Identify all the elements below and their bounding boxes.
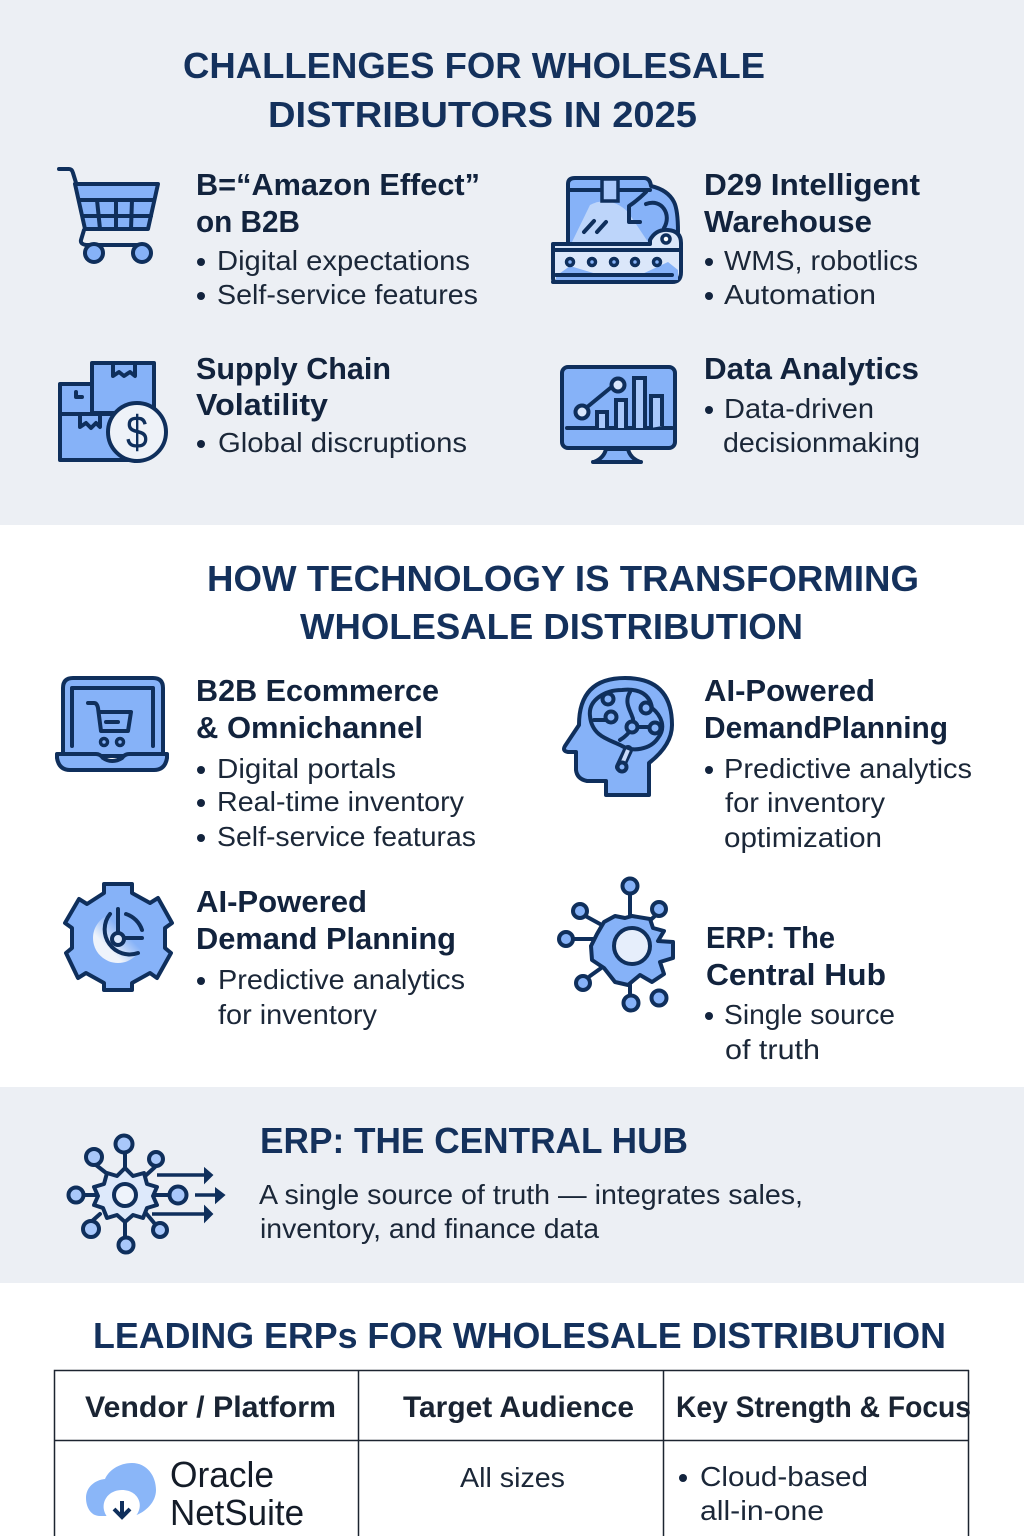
icon: brain head xyxy=(564,678,672,795)
text: B2B ecommerce: & Omnichannel xyxy=(196,710,423,745)
text: Amazon effect: Digital expectations xyxy=(217,245,470,276)
icon: shopping cart xyxy=(59,169,158,262)
text: AI demand planning one: AI-Powered xyxy=(704,673,875,708)
table header: vendor: Vendor / Platform xyxy=(85,1391,336,1424)
table: ERP vendors xyxy=(54,1370,971,1536)
text: ERP the central hub xyxy=(705,920,895,1065)
text: ERP the central hub: Central Hub xyxy=(706,957,886,992)
panel: how technology is transforming xyxy=(57,558,972,1065)
text: Amazon effect: on B2B xyxy=(196,204,300,239)
text: AI demand planning two: for inventory xyxy=(218,999,377,1030)
text: ERP the central hub: of truth xyxy=(725,1034,820,1065)
text: ERP the central hub: Single source xyxy=(724,999,895,1030)
icon: gear with clock xyxy=(65,884,172,990)
text: intelligent warehouse: D29 Intelligent xyxy=(704,167,920,202)
text: B2B ecommerce xyxy=(196,673,476,852)
heading: ERP the central hub: ERP: THE CENTRAL HUB xyxy=(260,1120,688,1161)
text: single source of truth: inventory, and finance data xyxy=(260,1213,599,1244)
cell: Oracle NetSuite xyxy=(170,1454,304,1533)
text: intelligent warehouse xyxy=(704,167,920,310)
icon: boxes with dollar: $ xyxy=(126,406,148,458)
text: supply chain volatility: Volatility xyxy=(196,387,329,422)
text: ERP the central hub: ERP: The xyxy=(706,920,835,955)
text: intelligent warehouse: Warehouse xyxy=(704,204,872,239)
text: supply chain volatility: Supply Chain xyxy=(196,351,391,386)
heading: challenges: CHALLENGES FOR WHOLESALE xyxy=(183,45,765,86)
heading: technology: HOW TECHNOLOGY IS TRANSFORMING xyxy=(207,558,919,599)
icon: intelligent warehouse xyxy=(553,178,681,282)
text: Amazon effect xyxy=(196,167,480,310)
text: B2B ecommerce: Self-service featuras xyxy=(217,821,476,852)
text: intelligent warehouse: WMS, robotlics xyxy=(724,245,918,276)
text: AI demand planning one: optimization xyxy=(724,822,882,853)
text: B2B ecommerce: Real-time inventory xyxy=(217,786,464,817)
panel: ERP the central hub banner xyxy=(0,1087,1024,1283)
panel: leading ERPs xyxy=(54,1315,971,1536)
panel: challenges for wholesale distributors xyxy=(0,0,1024,525)
text: AI demand planning two xyxy=(196,884,465,1030)
text: single source of truth xyxy=(259,1179,803,1244)
cell: cloud-based: Cloud-based xyxy=(700,1461,868,1492)
icon: laptop with cart xyxy=(57,678,167,770)
heading: challenges xyxy=(183,45,765,135)
table header: target audience: Target Audience xyxy=(403,1391,634,1424)
text: AI demand planning two: AI-Powered xyxy=(196,884,367,919)
icon: boxes with dollar xyxy=(60,363,166,461)
heading: leading ERPs: LEADING ERPs FOR WHOLESALE DISTRIBUTION xyxy=(93,1315,946,1356)
text: AI demand planning one: Predictive analytics xyxy=(724,753,972,784)
table header: key strength: Key Strength & Focus xyxy=(676,1391,971,1424)
text: AI demand planning one: DemandPlanning xyxy=(704,710,948,745)
cell: Oracle NetSuite: NetSuite xyxy=(170,1492,304,1533)
text: supply chain volatility: Global discruptions xyxy=(218,427,467,458)
text: single source of truth: A single source of truth — integrates sales, xyxy=(259,1179,803,1210)
text: AI demand planning one: for inventory xyxy=(725,787,885,818)
heading: challenges: DISTRIBUTORS IN 2025 xyxy=(268,94,697,135)
heading: technology xyxy=(207,558,919,647)
icon: analytics monitor xyxy=(562,367,675,462)
text: AI demand planning one xyxy=(704,673,972,853)
text: Amazon effect: Self-service features xyxy=(217,279,478,310)
text: B2B ecommerce: B2B Ecommerce xyxy=(196,673,439,708)
text: AI demand planning two: Predictive analytics xyxy=(218,964,465,995)
icon: cloud download xyxy=(86,1463,156,1518)
cell: cloud-based: all-in-one xyxy=(700,1495,824,1526)
text: intelligent warehouse: Automation xyxy=(724,279,876,310)
text: data analytics: Data-driven xyxy=(724,393,874,424)
text: data analytics: Data Analytics xyxy=(704,351,919,386)
text: Amazon effect: B=“Amazon Effect” xyxy=(196,167,480,202)
text: data analytics: decisionmaking xyxy=(723,427,920,458)
icon: ERP hub with arrows xyxy=(68,1136,224,1252)
cell: all sizes: All sizes xyxy=(460,1462,565,1493)
text: data analytics xyxy=(704,351,920,458)
icon: gear hub xyxy=(559,878,673,1010)
cell: cloud-based xyxy=(679,1461,868,1526)
text: AI demand planning two: Demand Planning xyxy=(196,921,456,956)
text: supply chain volatility xyxy=(196,351,467,458)
heading: technology: WHOLESALE DISTRIBUTION xyxy=(300,606,803,647)
cell: Oracle NetSuite: Oracle xyxy=(170,1454,274,1495)
text: B2B ecommerce: Digital portals xyxy=(217,753,396,784)
